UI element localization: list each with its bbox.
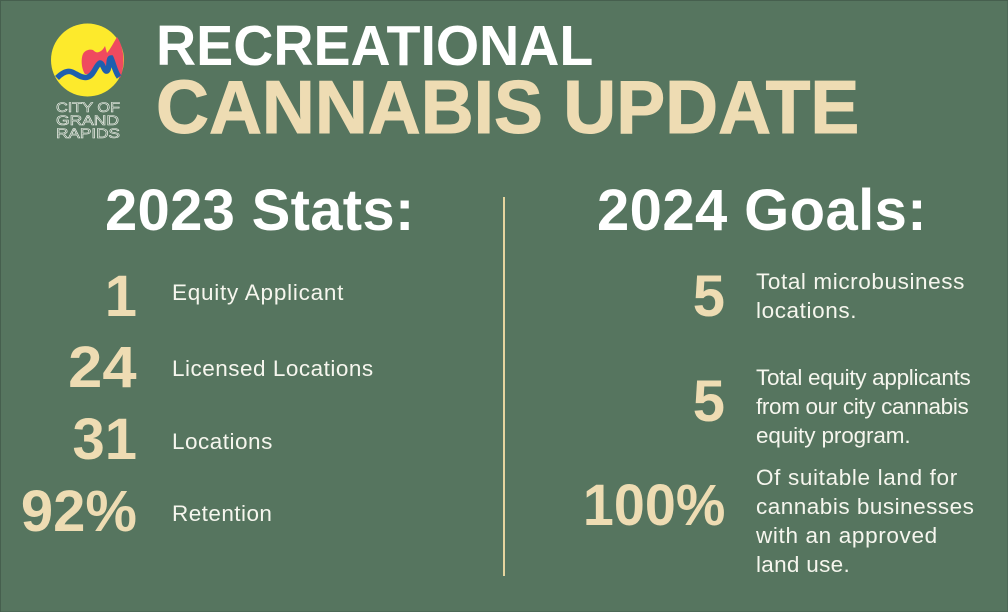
label: Equity Applicant xyxy=(172,280,344,305)
goal: 100% suitable land xyxy=(583,465,974,577)
label xyxy=(756,269,965,323)
label: with an approved xyxy=(756,523,938,548)
label: from our city cannabis xyxy=(756,394,968,419)
title xyxy=(156,14,859,149)
title line: cannabis update: CANNABIS UPDATE xyxy=(156,65,859,149)
logo: City of Grand Rapids xyxy=(51,24,124,141)
label xyxy=(756,465,974,577)
number: 1 xyxy=(105,264,137,329)
label: land use. xyxy=(756,552,850,577)
logo wordmark: GRAND xyxy=(56,112,119,128)
label: Locations xyxy=(172,429,273,454)
heading: 2024 goals: 2024 Goals: xyxy=(597,178,927,243)
number: 92% xyxy=(21,479,137,544)
icon: red mountain shape xyxy=(82,37,124,78)
panel: 2024 goals xyxy=(583,264,974,577)
label xyxy=(756,365,970,448)
center divider xyxy=(503,197,505,576)
number: 31 xyxy=(72,407,137,472)
number: 24 xyxy=(69,335,137,400)
label: locations. xyxy=(756,298,857,323)
panel: 2023 stats xyxy=(21,264,374,544)
stat: 31 locations xyxy=(72,407,273,472)
logo wordmark: CITY OF xyxy=(56,99,120,115)
logo wordmark xyxy=(56,99,120,141)
icon: blue river wave xyxy=(57,58,119,78)
title line: recreational: RECREATIONAL xyxy=(156,14,593,78)
goal: 5 equity applicants xyxy=(693,365,970,448)
label: equity program. xyxy=(756,423,911,448)
stat: 24 licensed locations xyxy=(69,335,374,400)
heading: 2023 stats: 2023 Stats: xyxy=(105,178,415,243)
label: Of suitable land for xyxy=(756,465,958,490)
stat: 1 equity applicant xyxy=(105,264,344,329)
number: 5 xyxy=(693,369,725,434)
number: 100% xyxy=(583,473,725,538)
label: Total microbusiness xyxy=(756,269,965,294)
icon: yellow sun circle xyxy=(51,24,124,96)
number: 5 xyxy=(693,264,725,329)
goal: 5 microbusiness locations xyxy=(693,264,965,329)
label: Retention xyxy=(172,501,272,526)
logo wordmark: RAPIDS xyxy=(56,125,120,141)
label: Total equity applicants xyxy=(756,365,970,390)
stat: 92% retention xyxy=(21,479,272,544)
label: cannabis businesses xyxy=(756,494,974,519)
label: Licensed Locations xyxy=(172,356,374,381)
